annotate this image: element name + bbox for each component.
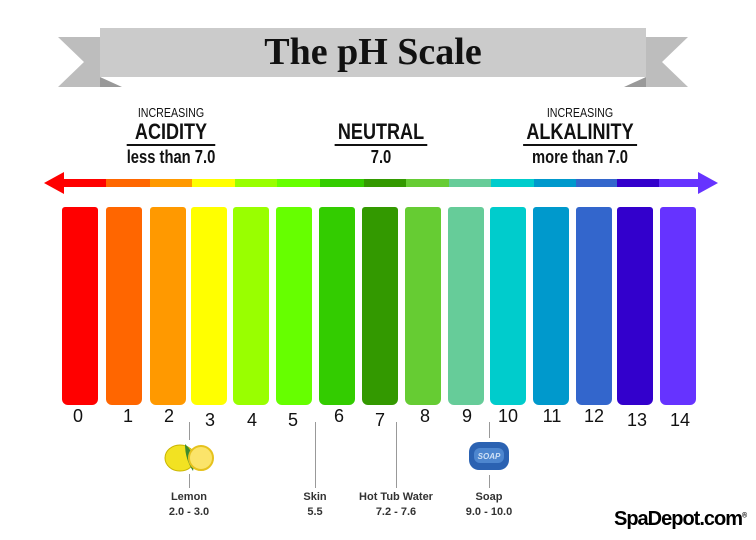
label: lemon	[169, 491, 209, 518]
label: hot tub water: Hot Tub Water	[359, 491, 433, 503]
heading: acidity	[126, 105, 216, 167]
label: skin: 5.5	[307, 506, 323, 518]
bar chart: pH bars: 5	[288, 410, 298, 430]
heading: neutral: 7.0	[371, 147, 391, 167]
label: lemon: 2.0 - 3.0	[169, 506, 209, 518]
bar chart: pH bars: 12	[584, 406, 604, 426]
bar chart: pH bars	[62, 207, 696, 430]
title banner	[58, 28, 688, 87]
bar chart: pH bars: 8	[420, 406, 430, 426]
logo: SpaDepot.com®	[614, 508, 746, 530]
label: skin: Skin	[303, 491, 327, 503]
label: skin	[303, 491, 327, 518]
icon: lemon	[164, 444, 214, 472]
heading: acidity: INCREASING	[138, 105, 204, 120]
heading: alkalinity: more than 7.0	[532, 147, 628, 167]
title: The pH Scale	[264, 31, 482, 73]
heading: alkalinity: INCREASING	[547, 105, 613, 120]
heading: neutral: NEUTRAL	[338, 119, 424, 144]
bar chart: pH bars: 9	[462, 406, 472, 426]
icon: soap: SOAP	[478, 452, 501, 461]
bar chart: pH bars: 7	[375, 410, 385, 430]
label: lemon: Lemon	[171, 491, 207, 503]
heading: neutral	[334, 119, 428, 167]
heading: alkalinity: ALKALINITY	[526, 119, 634, 144]
bar chart: pH bars: 3	[205, 410, 215, 430]
label: hot tub water	[359, 491, 433, 518]
bar chart: pH bars: 4	[247, 410, 257, 430]
bar chart: pH bars: 6	[334, 406, 344, 426]
label: soap: Soap	[476, 491, 502, 503]
bar chart: pH bars: 14	[670, 410, 690, 430]
bar chart: pH bars: 11	[543, 406, 561, 426]
label: hot tub water: 7.2 - 7.6	[376, 506, 416, 518]
label: soap	[466, 491, 512, 518]
bar chart: pH bars: 1	[123, 406, 133, 426]
bar chart: pH bars: 0	[73, 406, 83, 426]
bar chart: pH bars: 2	[164, 406, 174, 426]
heading: acidity: less than 7.0	[127, 147, 215, 167]
heading: acidity: ACIDITY	[135, 119, 207, 144]
icon: soap	[469, 442, 509, 470]
heading: alkalinity	[523, 105, 638, 167]
bar chart: pH bars: 10	[498, 406, 518, 426]
arrow: rainbow scale	[44, 172, 718, 194]
bar chart: pH bars: 13	[627, 410, 647, 430]
label: soap: 9.0 - 10.0	[466, 506, 512, 518]
